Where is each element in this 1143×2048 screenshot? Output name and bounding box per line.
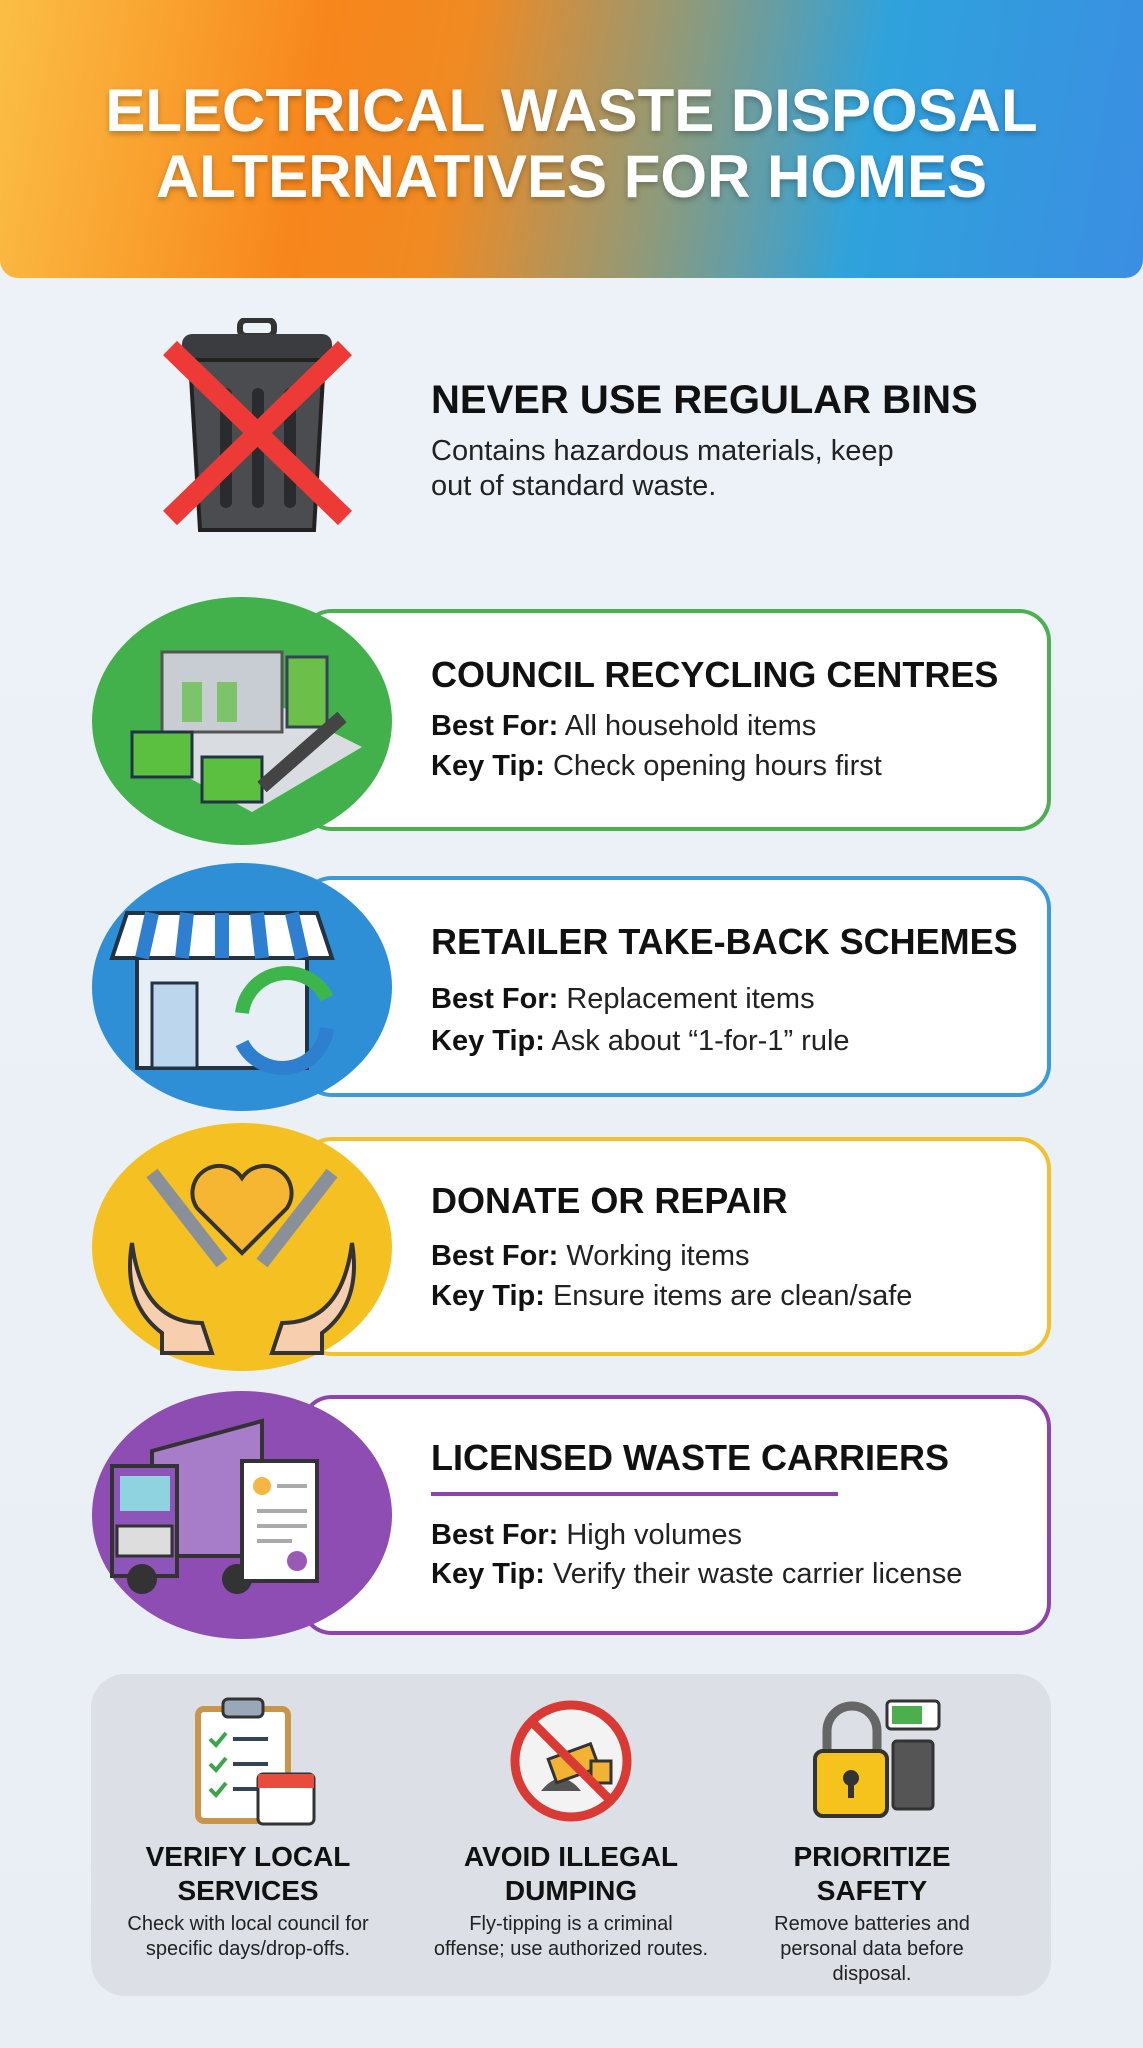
- text: key tip: Key Tip: Verify their waste carrier license: [431, 1558, 962, 1590]
- text: key tip: Key Tip: Ensure items are clean/safe: [431, 1280, 912, 1312]
- panel: donate or repair: [92, 1123, 1051, 1371]
- text: disposal.: [833, 1963, 911, 1985]
- title: ELECTRICAL WASTE DISPOSAL: [105, 77, 1038, 144]
- text: bins description: [431, 435, 894, 502]
- tip: avoid illegal dumping: [434, 1700, 708, 1960]
- title: [105, 77, 1038, 210]
- icon: crossed bin: [163, 318, 352, 532]
- divider underline: [431, 1492, 838, 1496]
- heading: RETAILER TAKE-BACK SCHEMES: [431, 921, 1018, 962]
- text: best for: Best For: Replacement items: [431, 983, 815, 1015]
- heading: LICENSED WASTE CARRIERS: [431, 1437, 949, 1478]
- text: Remove batteries and: [774, 1913, 970, 1935]
- panel: retailer take-back schemes: [92, 863, 1051, 1111]
- heading: [464, 1841, 678, 1906]
- text: specific days/drop-offs.: [146, 1938, 350, 1960]
- icon: hands, heart and wrenches: [92, 1123, 392, 1371]
- text: [127, 1913, 369, 1960]
- text: Check with local council for: [127, 1913, 369, 1935]
- heading: PRIORITIZE: [793, 1841, 951, 1872]
- panel: licensed waste carriers: [92, 1391, 1051, 1639]
- text: [434, 1913, 708, 1960]
- panel: council recycling centres: [92, 597, 1051, 845]
- text: Fly-tipping is a criminal: [469, 1913, 673, 1935]
- icon: shop with arrows: [92, 863, 392, 1111]
- icon: padlock, battery, sd card: [813, 1700, 940, 1818]
- text: best for: Best For: Working items: [431, 1240, 750, 1272]
- heading: [146, 1841, 350, 1906]
- icon: truck and certificate: [92, 1391, 392, 1639]
- tip: prioritize safety: [774, 1700, 970, 1985]
- text: bins description: Contains hazardous materials, keep: [431, 435, 894, 467]
- text: best for: Best For: High volumes: [431, 1519, 742, 1551]
- heading: never use regular bins: NEVER USE REGULAR BINS: [431, 378, 978, 422]
- heading: SERVICES: [177, 1875, 319, 1906]
- heading: DUMPING: [505, 1875, 637, 1906]
- tip: verify local services: [127, 1698, 369, 1960]
- heading: VERIFY LOCAL: [146, 1841, 350, 1872]
- title: ALTERNATIVES FOR HOMES: [156, 143, 987, 210]
- panel: tips: [91, 1674, 1051, 1996]
- text: personal data before: [780, 1938, 964, 1960]
- heading: SAFETY: [817, 1875, 927, 1906]
- text: bins description: out of standard waste.: [431, 470, 716, 502]
- text: [774, 1913, 970, 1985]
- icon: no dumping sign: [510, 1700, 632, 1822]
- text: best for: Best For: All household items: [431, 710, 816, 742]
- text: key tip: Key Tip: Check opening hours first: [431, 750, 882, 782]
- heading: AVOID ILLEGAL: [464, 1841, 678, 1872]
- heading: DONATE OR REPAIR: [431, 1180, 788, 1221]
- header banner: [0, 0, 1143, 278]
- heading: COUNCIL RECYCLING CENTRES: [431, 654, 998, 695]
- heading: [793, 1841, 951, 1906]
- icon: clipboard and calendar: [195, 1698, 316, 1826]
- icon: recycling centre: [92, 597, 392, 845]
- text: offense; use authorized routes.: [434, 1938, 708, 1960]
- text: key tip: Key Tip: Ask about “1-for-1” rule: [431, 1025, 850, 1057]
